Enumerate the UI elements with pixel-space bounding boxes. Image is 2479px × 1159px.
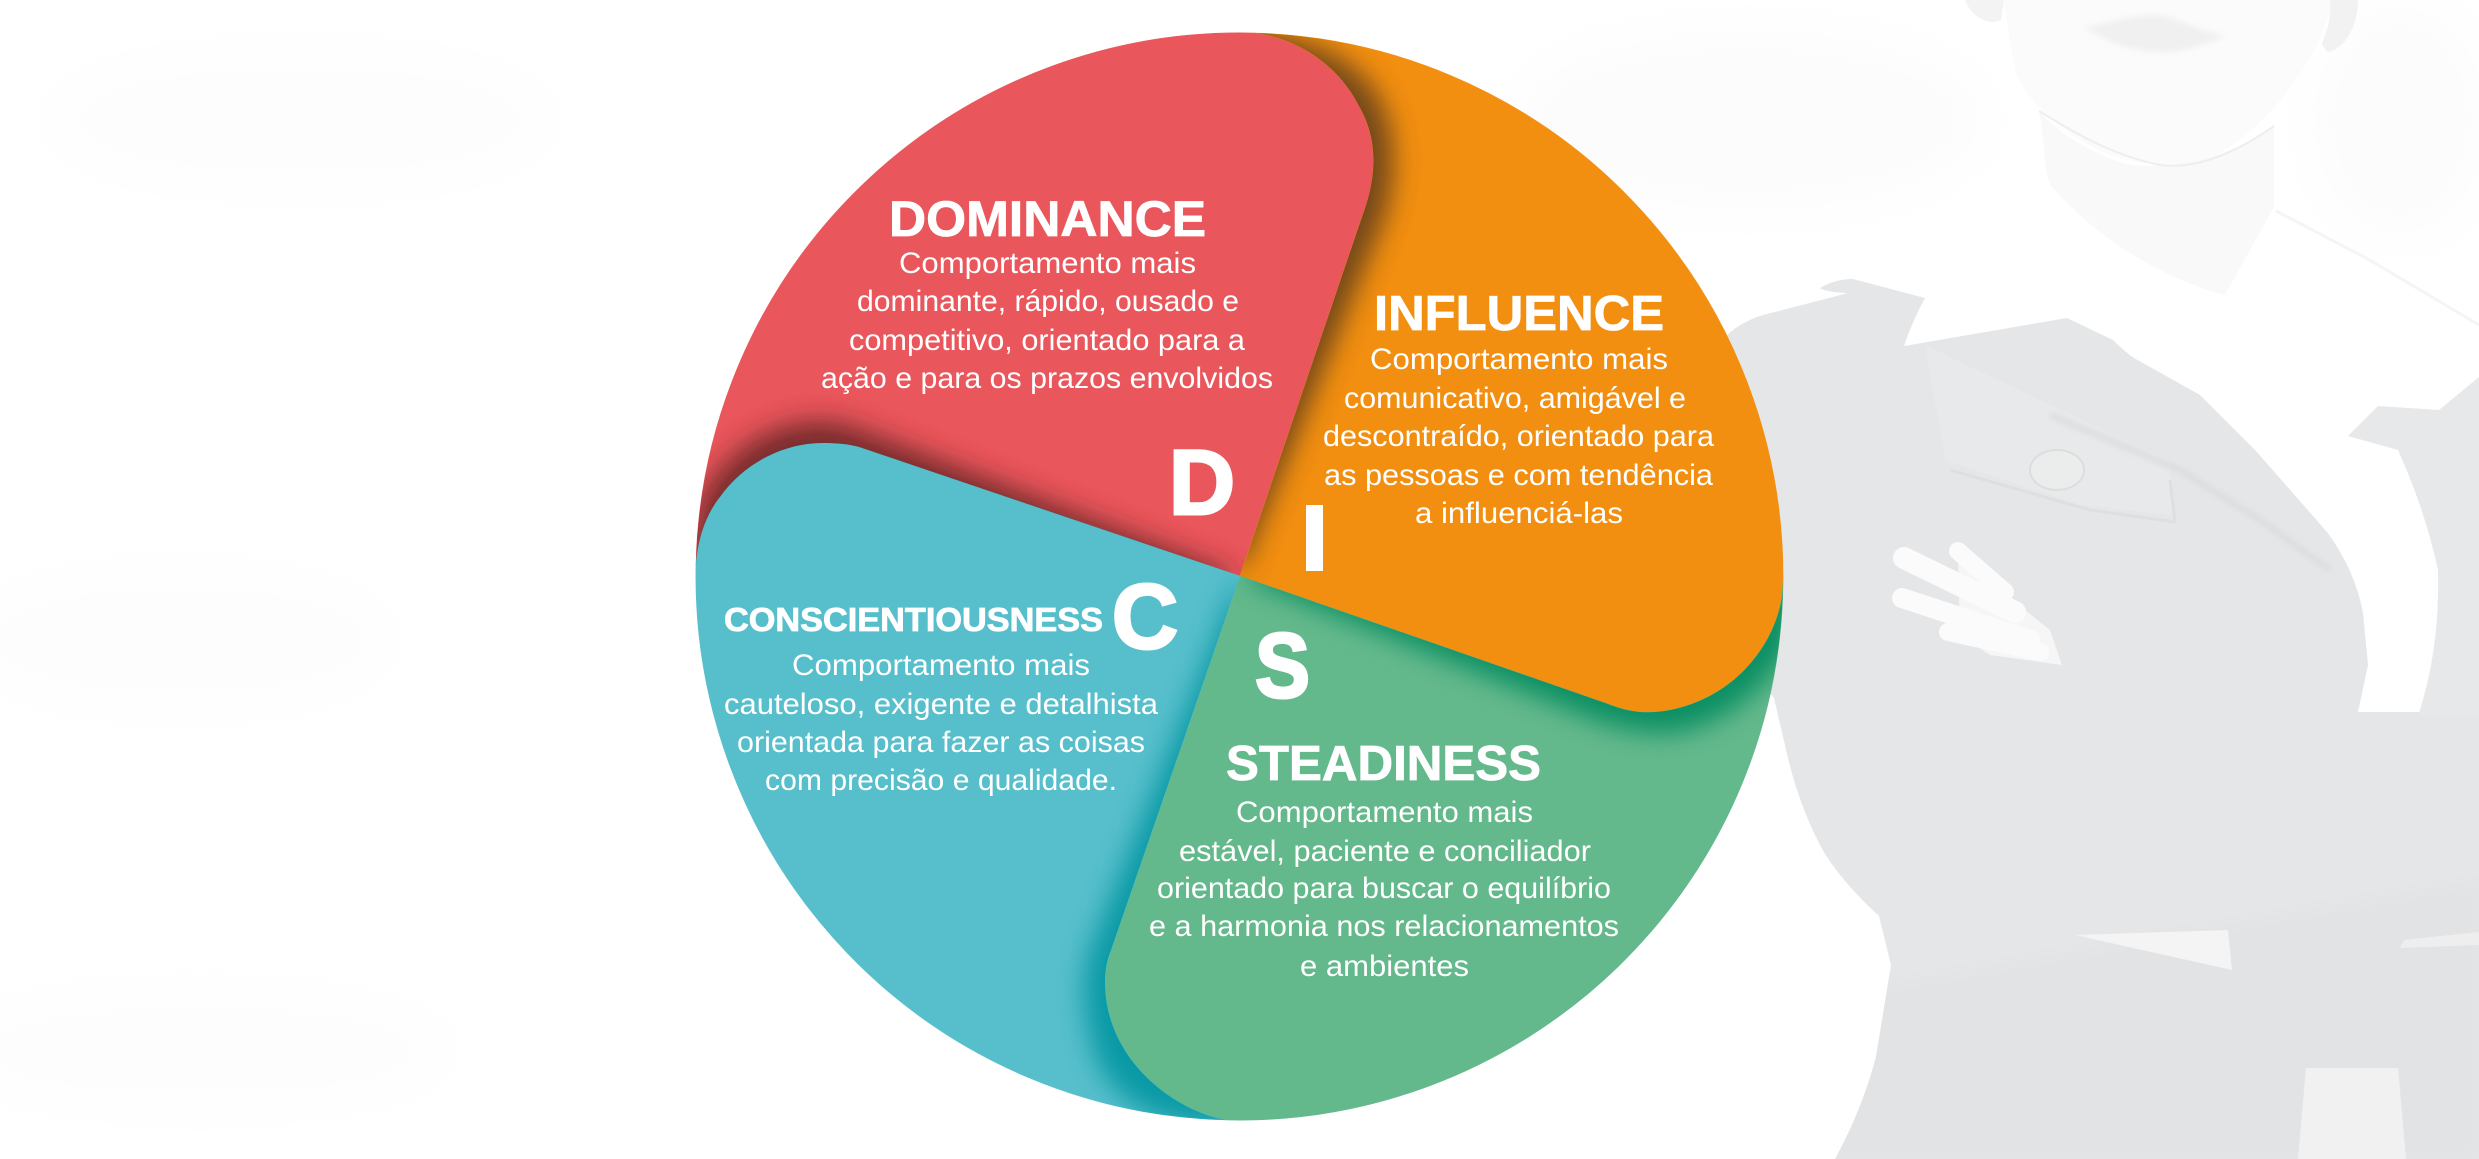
face and neck bbox=[1965, 0, 2479, 325]
panel: conscientiousness segment bbox=[696, 443, 1240, 1120]
letter I bbox=[1306, 505, 1323, 571]
description: conscientiousness: Comportamento mais bbox=[792, 649, 1090, 682]
text block: dominance bbox=[821, 191, 1273, 395]
description: steadiness: e ambientes bbox=[1300, 950, 1469, 983]
heading: conscientiousness: CONSCIENTIOUSNESS bbox=[724, 601, 1103, 638]
shadow cast on influence segment bbox=[1240, 33, 1412, 579]
panel: influence segment bbox=[1240, 33, 1783, 712]
chart: DISC pinwheel circle bbox=[690, 30, 1792, 1125]
description: dominance: dominante, rápido, ousado e bbox=[857, 285, 1239, 318]
letter S: S bbox=[1255, 615, 1310, 717]
description: conscientiousness: com precisão e qualidade. bbox=[765, 764, 1117, 797]
description: conscientiousness: orientada para fazer as coisas bbox=[737, 726, 1145, 759]
description: influence: as pessoas e com tendência bbox=[1324, 459, 1713, 492]
text block: steadiness bbox=[1149, 737, 1619, 983]
description: dominance bbox=[821, 247, 1273, 395]
description: dominance: ação e para os prazos envolvidos bbox=[821, 362, 1273, 395]
pocket flap with button bbox=[1925, 345, 2330, 570]
description: influence: comunicativo, amigável e bbox=[1344, 382, 1686, 415]
text block: influence bbox=[1323, 287, 1714, 530]
description: influence: descontraído, orientado para bbox=[1323, 420, 1714, 453]
description: steadiness: Comportamento mais bbox=[1236, 796, 1533, 829]
description: steadiness: orientado para buscar o equilíbrio bbox=[1157, 872, 1611, 905]
description: dominance: Comportamento mais bbox=[899, 247, 1196, 280]
description: influence: Comportamento mais bbox=[1370, 343, 1668, 376]
text block: conscientiousness bbox=[724, 601, 1158, 797]
panel: steadiness segment bbox=[1105, 576, 1783, 1120]
heading: dominance: DOMINANCE bbox=[889, 191, 1206, 247]
heading: influence: INFLUENCE bbox=[1374, 287, 1664, 341]
light gaps in clothing bbox=[2075, 930, 2479, 1159]
letter D: D bbox=[1169, 432, 1235, 534]
shadow cast on dominance segment bbox=[696, 404, 1242, 576]
letter C: C bbox=[1112, 566, 1178, 668]
heading: steadiness: STEADINESS bbox=[1226, 737, 1541, 791]
description: conscientiousness: cauteloso, exigente e detalhista bbox=[724, 688, 1158, 721]
description: dominance: competitivo, orientado para a bbox=[849, 324, 1245, 357]
shadow cast on steadiness segment bbox=[1239, 576, 1783, 749]
lower body shading bbox=[1800, 880, 2479, 1159]
description: influence bbox=[1323, 343, 1714, 530]
description: steadiness: estável, paciente e conciliador bbox=[1179, 835, 1591, 868]
description: conscientiousness bbox=[724, 649, 1158, 797]
crossed hand fingers bbox=[1902, 551, 2062, 665]
photo: faded woman with crossed arms bbox=[1690, 0, 2479, 1159]
right side of jacket bbox=[2348, 377, 2479, 716]
jacket silhouette bbox=[1690, 279, 2479, 1159]
description: influence: a influenciá-las bbox=[1415, 497, 1623, 530]
description: steadiness bbox=[1149, 796, 1619, 983]
panel: dominance segment bbox=[696, 33, 1373, 576]
shadow cast on conscientiousness segment bbox=[1069, 578, 1239, 1120]
description: steadiness: e a harmonia nos relacionamentos bbox=[1149, 910, 1619, 943]
